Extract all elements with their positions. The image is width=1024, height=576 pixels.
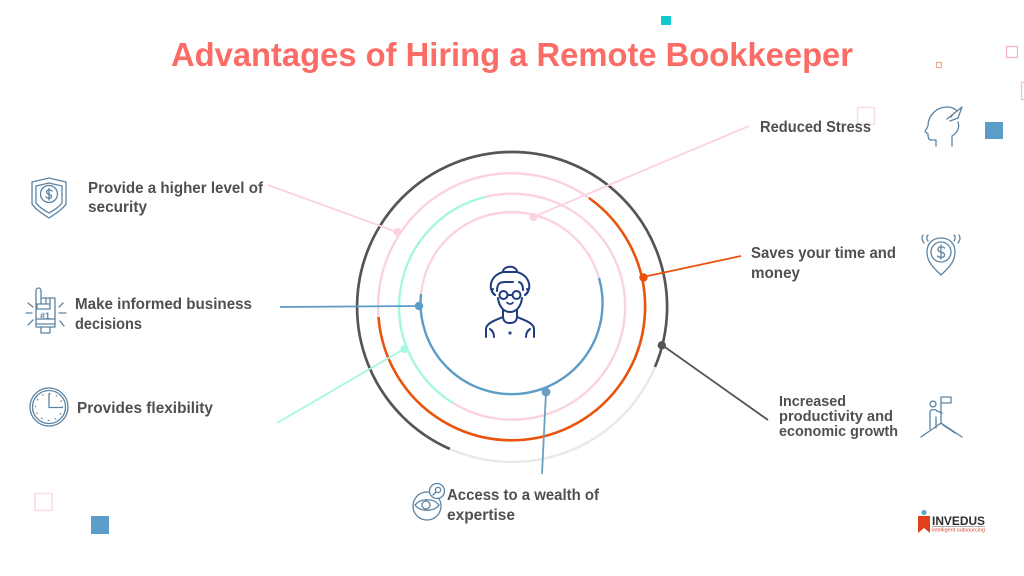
panel: informed decisions — [26, 288, 252, 333]
connector: saves time — [639, 256, 741, 282]
text: productivity: Increased — [779, 393, 846, 410]
connector: security — [268, 185, 402, 236]
icon: location pin with dollar — [922, 235, 960, 275]
icon: person with flag on summit — [921, 397, 962, 437]
panel: productivity — [779, 393, 962, 440]
text: saves time: Saves your time and — [751, 245, 896, 262]
text: informed decisions: decisions — [75, 316, 142, 333]
icon: foam finger — [26, 288, 66, 333]
text: saves time: money — [751, 265, 800, 282]
logo: Invedus: intelligent outsourcing — [932, 528, 985, 534]
connector: informed decisions — [280, 302, 423, 310]
text: expertise: Access to a wealth of — [447, 487, 600, 504]
ring 4: inner — [421, 212, 603, 394]
icon: foam finger: #1 — [40, 311, 50, 321]
concentric ring chart — [357, 152, 667, 462]
connector: flexibility — [277, 345, 408, 423]
text: productivity: productivity and — [779, 408, 893, 425]
text: security: security — [88, 199, 147, 216]
title: Advantages of Hiring a Remote Bookkeeper — [171, 37, 853, 74]
ring 3: mint and pink — [399, 194, 625, 420]
connector: expertise — [542, 388, 550, 474]
ring 2: orange and pink — [378, 173, 645, 440]
connector: productivity — [658, 341, 768, 420]
panel: expertise — [413, 484, 600, 524]
icon: eye with magnifier — [413, 484, 444, 520]
panel: saves time and money — [751, 235, 960, 282]
icon: bookkeeper — [486, 267, 534, 337]
text: productivity: economic growth — [779, 423, 898, 440]
ring 1: outer — [357, 152, 667, 462]
panel: reduced stress — [760, 107, 962, 146]
panel: flexibility — [30, 388, 213, 426]
text: security: Provide a higher level of — [88, 180, 264, 197]
text: flexibility: Provides flexibility — [77, 400, 213, 417]
icon: clock — [30, 388, 68, 426]
text: expertise: expertise — [447, 507, 515, 524]
logo: Invedus: INVEDUS — [932, 514, 985, 528]
panel: security — [32, 178, 264, 218]
icon: shield with dollar — [32, 178, 66, 218]
icon: head with arrow — [925, 107, 962, 146]
text: reduced stress: Reduced Stress — [760, 119, 871, 136]
text: informed decisions: Make informed business — [75, 296, 252, 313]
logo: Invedus — [918, 510, 985, 534]
connector: reduced stress — [530, 126, 749, 221]
